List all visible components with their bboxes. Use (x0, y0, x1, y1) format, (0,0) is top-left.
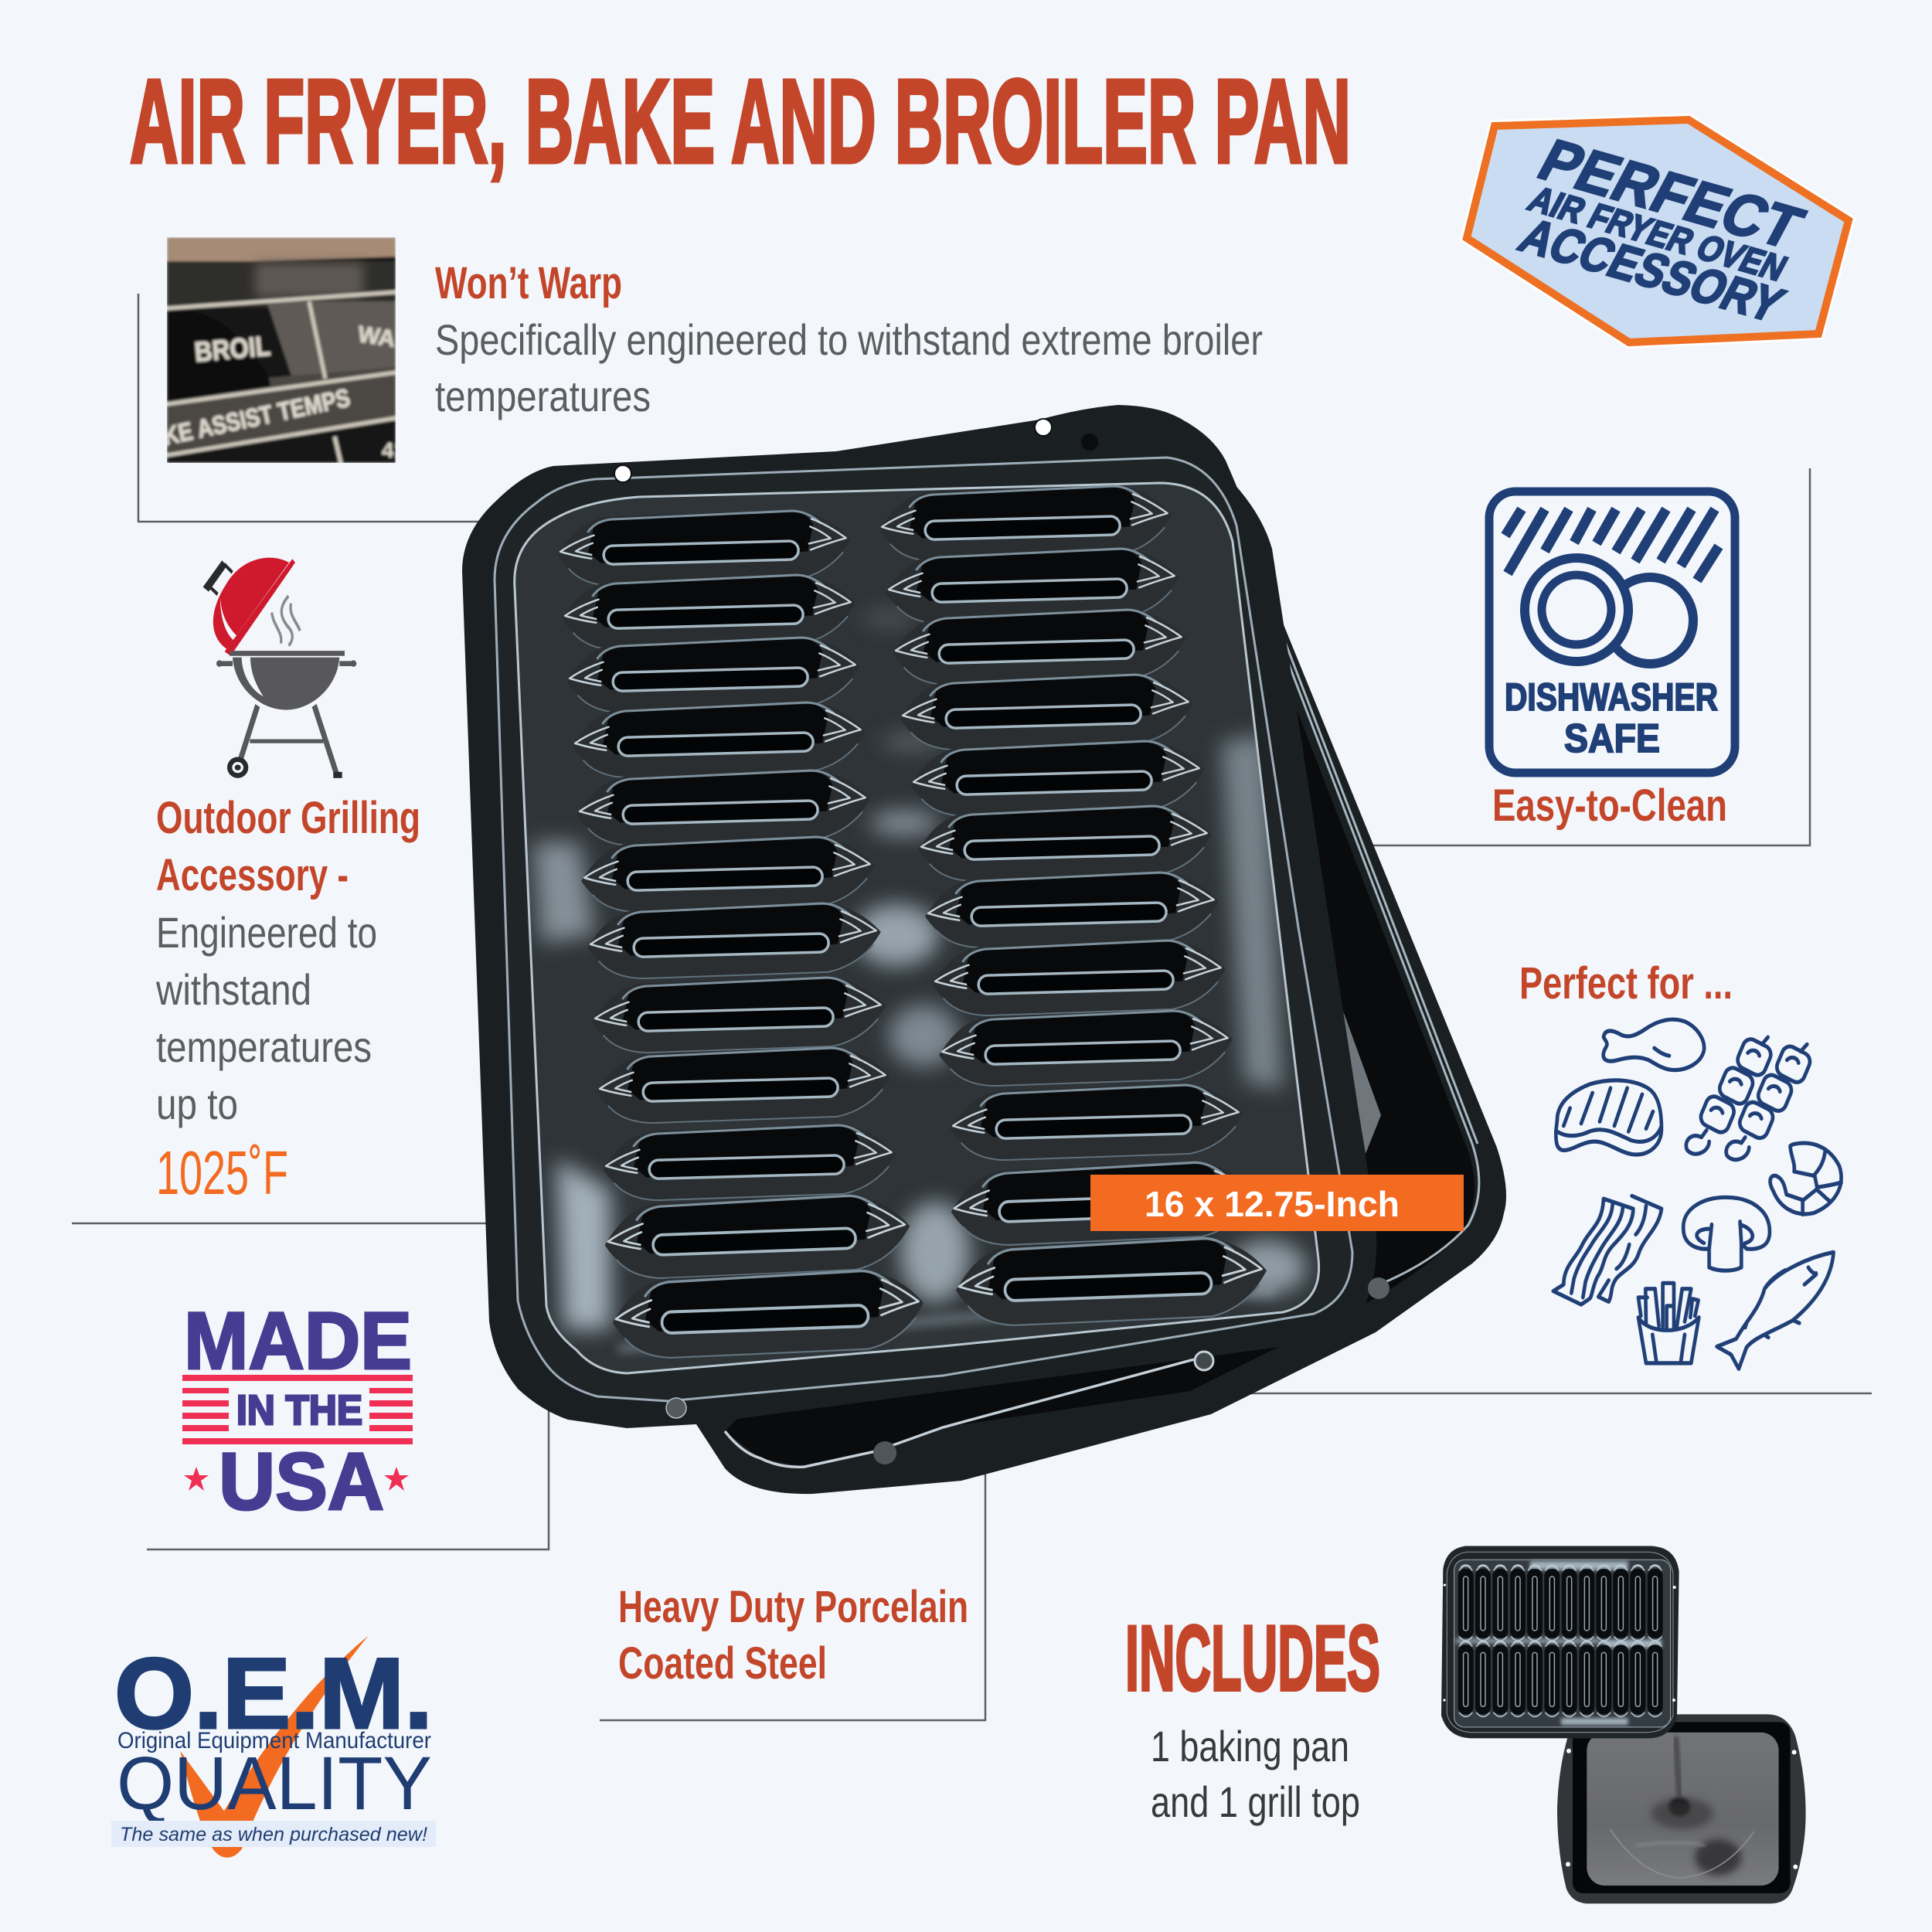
logo: oem quality: The same as when purchased new! (120, 1824, 427, 1845)
text: heavy duty porcelain: Heavy Duty Porcelain (618, 1582, 968, 1632)
bottom baking pan (696, 405, 1506, 1494)
logo: made in the usa: USA (219, 1437, 384, 1527)
badge: perfect air fryer oven accessory: AIR FRYER OVEN (1522, 180, 1794, 289)
callout lines (72, 294, 1872, 1720)
photo: oven broil panel: 41 (382, 438, 406, 462)
logo: made in the usa (182, 1296, 413, 1527)
text: outdoor grilling: 1025˚F (156, 1138, 288, 1207)
icon: steak (1556, 1080, 1662, 1155)
badge: perfect air fryer oven accessory: PERFECT (1528, 128, 1814, 260)
text: outdoor grilling: Engineered to (156, 908, 377, 957)
icon: skewers (1686, 1036, 1812, 1160)
baking pan (1557, 1714, 1806, 1903)
icon: mushroom (1683, 1197, 1770, 1270)
text: outdoor grilling (155, 793, 420, 1207)
icon: shrimp (1770, 1143, 1842, 1215)
icons: food (1553, 1019, 1842, 1369)
size label (1090, 1175, 1464, 1231)
text: outdoor grilling: Accessory - (156, 850, 349, 900)
text: won't warp: temperatures (435, 372, 651, 420)
text: won't warp: Won’t Warp (435, 258, 622, 308)
icon: dishwasher safe: DISHWASHER (1505, 675, 1718, 719)
text: heavy duty porcelain: Coated Steel (618, 1638, 827, 1689)
icon: dishwasher safe (1489, 492, 1735, 773)
logo: made in the usa: IN THE (236, 1387, 362, 1434)
icon: fish (1717, 1252, 1834, 1369)
logo: oem quality: O.E.M. (114, 1637, 433, 1750)
icon: drumstick (1604, 1019, 1704, 1070)
text: includes: and 1 grill top (1151, 1777, 1360, 1826)
left slot column (556, 509, 925, 1359)
main product image: broiler pan and grill (462, 405, 1506, 1494)
text: won't warp (435, 258, 1263, 420)
text: includes (1125, 1607, 1380, 1826)
icon: bacon (1553, 1196, 1662, 1304)
icon: grill (203, 558, 356, 778)
grill top (1441, 1546, 1679, 1738)
right slot column (878, 484, 1268, 1327)
logo: oem quality (111, 1636, 436, 1858)
text: outdoor grilling: Outdoor Grilling (156, 793, 420, 843)
badge: perfect air fryer oven accessory: ACCESSORY (1510, 208, 1794, 332)
text: easy to clean: Easy-to-Clean (1492, 781, 1727, 831)
rivets and holes (614, 419, 1389, 1464)
text: outdoor grilling: withstand (155, 965, 311, 1014)
logo: oem quality: Original Equipment Manufacturer (117, 1728, 431, 1753)
product image: baking pan and grill top (1441, 1546, 1806, 1903)
photo: oven broil panel: BROIL (193, 330, 271, 368)
text: includes: INCLUDES (1125, 1607, 1380, 1710)
text: perfect for: Perfect for ... (1519, 958, 1733, 1009)
icon: fries (1638, 1283, 1699, 1363)
photo: oven broil panel: KE ASSIST TEMPS (161, 383, 352, 451)
logo: made in the usa: MADE (184, 1296, 412, 1386)
logo: oem quality: QUALITY (117, 1741, 432, 1825)
text: outdoor grilling: temperatures (156, 1022, 372, 1071)
top grill plate (462, 438, 1376, 1428)
text: heavy duty porcelain (618, 1582, 968, 1689)
text: won't warp: Specifically engineered to withstand extreme broiler (435, 315, 1263, 364)
text: outdoor grilling: up to (156, 1080, 238, 1128)
badge: perfect air fryer oven accessory (1467, 120, 1849, 342)
photo: oven broil panel (161, 237, 413, 463)
photo: oven broil panel: WAR (356, 321, 413, 355)
text: includes: 1 baking pan (1151, 1722, 1349, 1770)
size label: 16 x 12.75-Inch (1145, 1184, 1400, 1224)
icon: dishwasher safe: SAFE (1564, 716, 1660, 761)
